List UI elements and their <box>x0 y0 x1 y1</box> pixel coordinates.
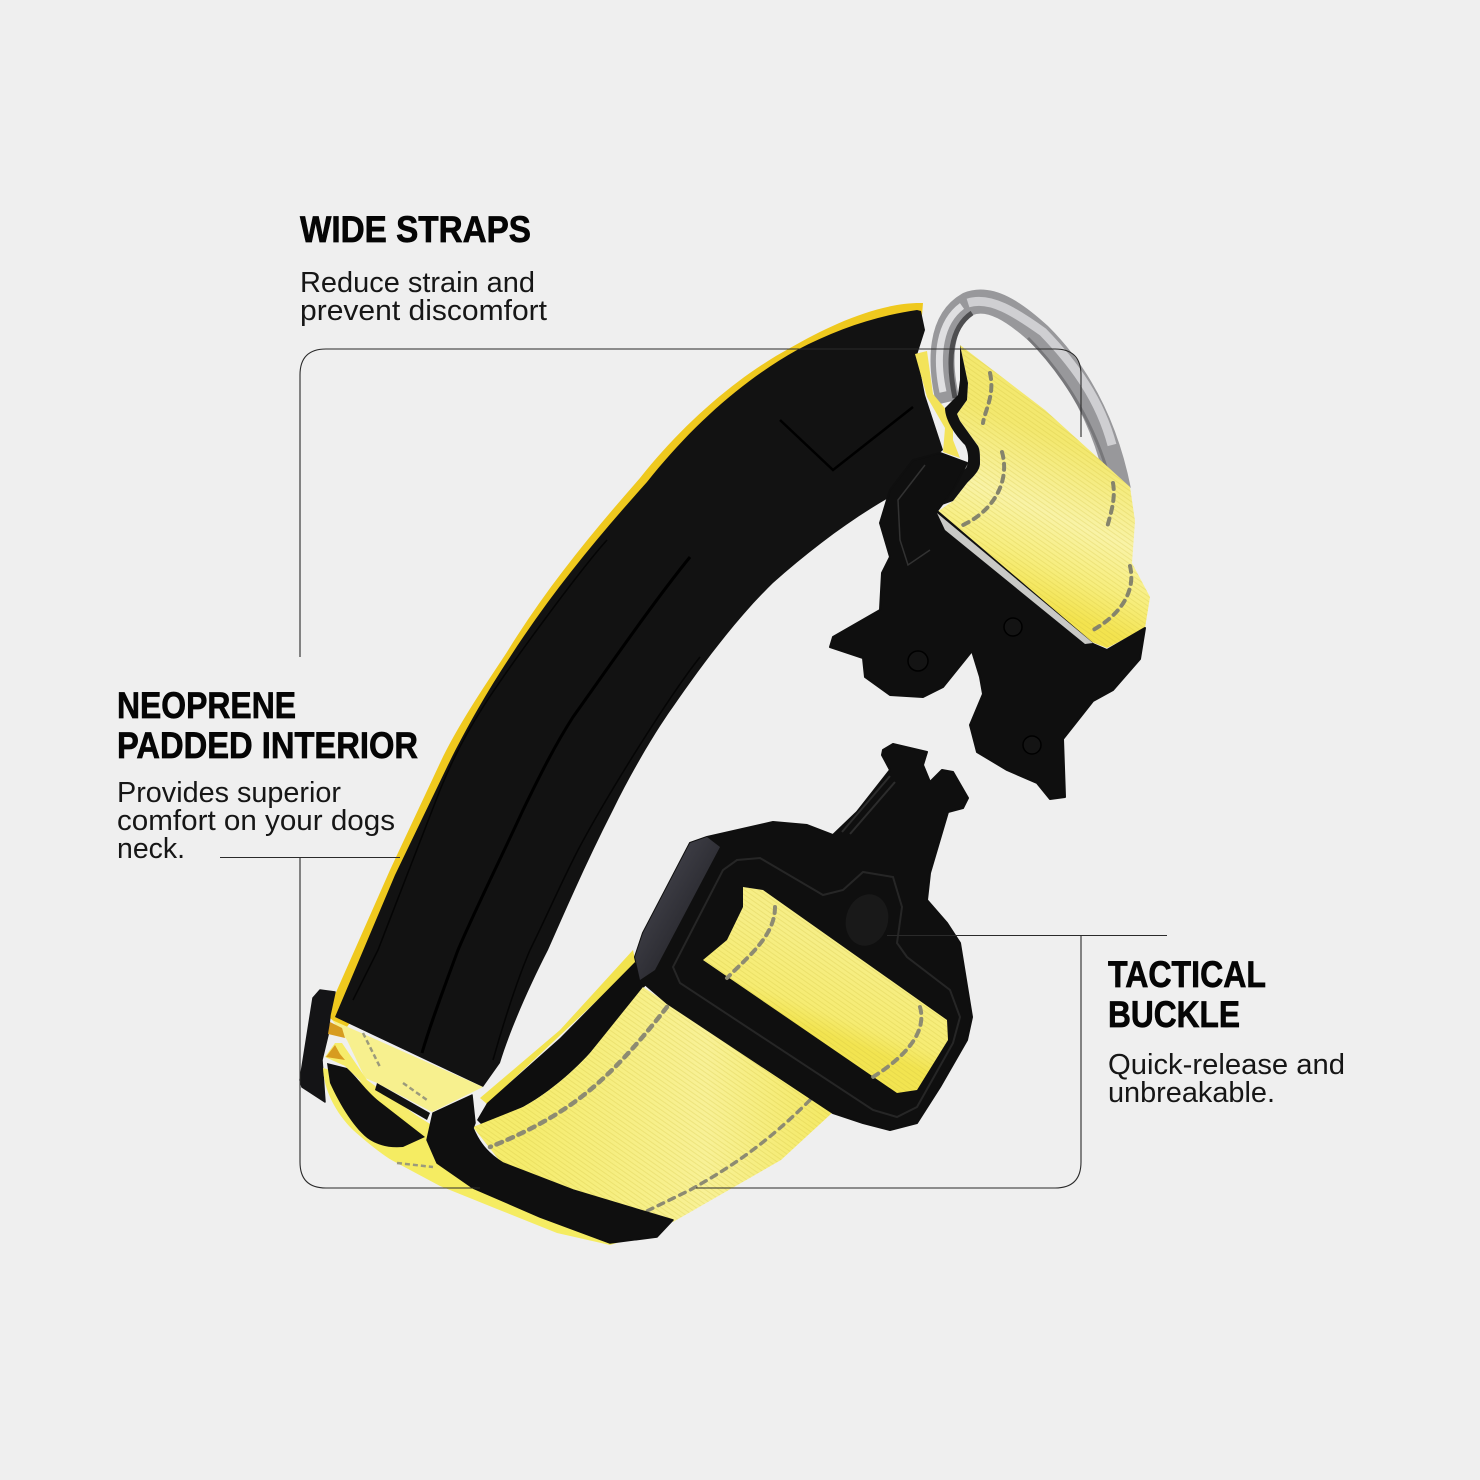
push button <box>840 889 894 951</box>
inner seam <box>493 657 700 1060</box>
heading: wide straps: WIDE STRAPS <box>300 209 531 250</box>
heading: neoprene padded interior: NEOPRENE <box>117 685 296 726</box>
folded yellow strap end <box>325 1020 483 1135</box>
text: neoprene description: neck. <box>117 833 185 865</box>
black webbing band and keeper <box>427 1095 673 1243</box>
neoprene padded interior <box>335 310 943 1087</box>
outer seam <box>353 540 607 1000</box>
text: tactical buckle description <box>1108 1049 1345 1109</box>
text: wide straps description: Reduce strain and <box>300 267 535 299</box>
silver plate edge <box>937 513 1093 644</box>
heading: neoprene padded interior <box>117 685 418 766</box>
velcro patch <box>780 407 913 470</box>
text: neoprene description: comfort on your dogs <box>117 805 395 837</box>
buckle bevel <box>635 837 720 980</box>
text: tactical buckle description: unbreakable. <box>1108 1077 1275 1109</box>
outer yellow strap lower layer <box>323 1068 640 1245</box>
slot stitching <box>727 907 775 978</box>
callout connector lines <box>220 349 1167 1188</box>
collar illustration <box>300 301 1150 1245</box>
stitching on folded end <box>363 1033 433 1167</box>
callout: wide straps <box>300 209 547 327</box>
text: neoprene description: Provides superior <box>117 777 341 809</box>
heading: tactical buckle <box>1108 954 1266 1035</box>
text: neoprene description <box>117 777 395 865</box>
callout: neoprene padded interior <box>117 685 418 865</box>
heading: tactical buckle: TACTICAL <box>1108 954 1266 995</box>
black edge of strap <box>942 345 980 505</box>
text: wide straps description: prevent discomfort <box>300 295 547 327</box>
strap stitching <box>983 373 991 423</box>
rivets <box>1004 618 1022 636</box>
frayed back strap <box>915 351 960 458</box>
padding seams <box>422 557 690 1053</box>
text: tactical buckle description: Quick-release and <box>1108 1049 1345 1081</box>
outer yellow rim of collar <box>326 303 923 1030</box>
callout: tactical buckle <box>1108 954 1345 1109</box>
yellow edge above gap <box>480 950 636 1104</box>
text: wide straps description <box>300 267 547 327</box>
black strip left <box>327 1063 425 1147</box>
yellow strap in slot <box>703 887 948 1093</box>
D ring <box>939 301 1119 490</box>
neck ridges <box>842 776 895 834</box>
reflective stitching on lower strap <box>490 1007 667 1147</box>
upper yellow strap <box>915 345 1150 648</box>
main lower strap face <box>473 987 832 1222</box>
buckle highlight <box>898 465 930 565</box>
black gap on lower strap <box>477 962 646 1125</box>
heading: neoprene padded interior: PADDED INTERIOR <box>117 725 418 766</box>
slot frame <box>673 858 960 1117</box>
upper buckle <box>830 453 1145 799</box>
lower buckle <box>635 744 972 1130</box>
black loop clip at left <box>300 990 335 1102</box>
heading: tactical buckle: BUCKLE <box>1108 994 1240 1035</box>
